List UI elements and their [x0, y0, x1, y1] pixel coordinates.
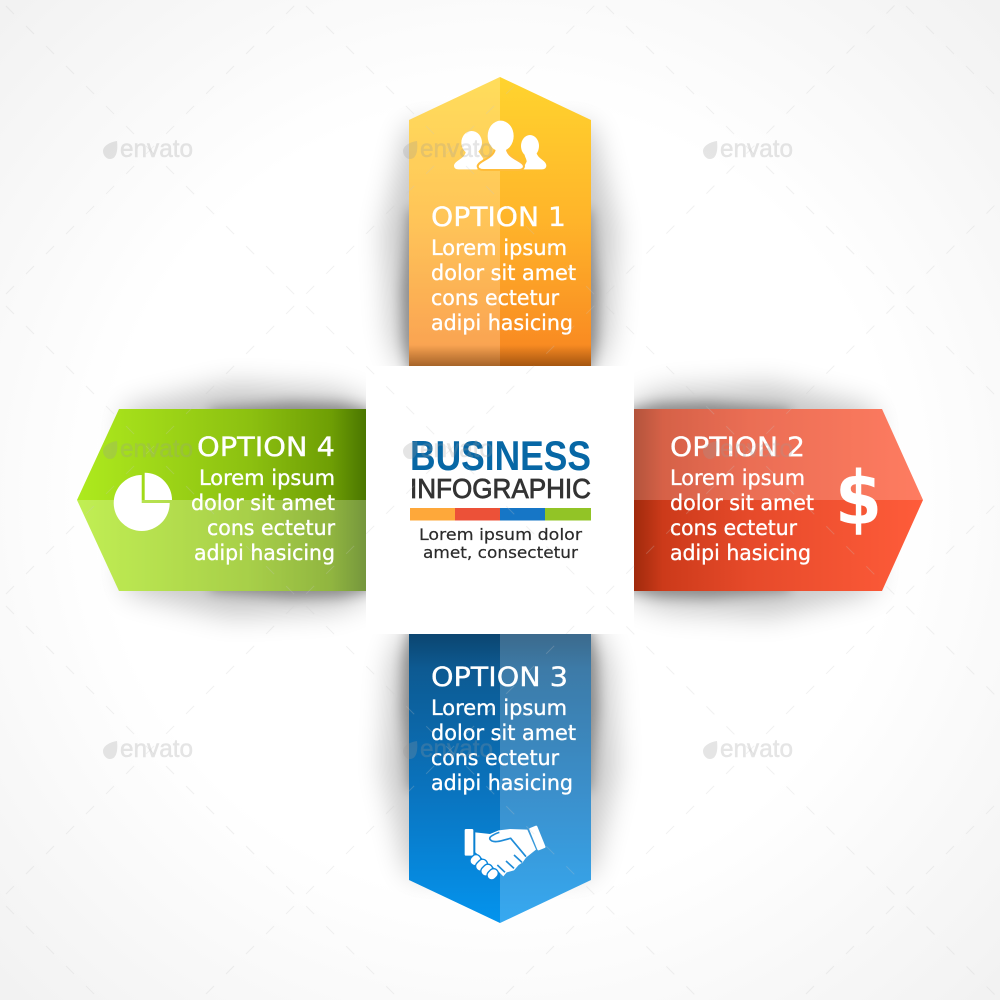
panel: option 3 — [409, 634, 591, 923]
icon: handshake — [465, 825, 546, 882]
text block: option 1: dolor sit amet — [431, 261, 576, 285]
center square background — [366, 366, 634, 634]
text block: option 4: adipi hasicing — [194, 541, 335, 565]
text block: option 4: dolor sit amet — [191, 491, 335, 515]
heading: option 3: OPTION 3 — [431, 662, 568, 693]
arrow shape: option 3 — [409, 634, 591, 923]
heading: option 1: OPTION 1 — [431, 202, 566, 233]
subtitle: amet, consectetur — [423, 543, 578, 562]
envato watermarks: envato — [720, 735, 793, 763]
heading: option 2: OPTION 2 — [670, 432, 805, 463]
envato watermarks: envato — [120, 135, 193, 163]
panel: center square — [366, 366, 634, 634]
icon: dollar sign: $ — [835, 456, 882, 542]
arrow shape: option 2 — [634, 409, 923, 591]
title: business: BUSINESS — [410, 432, 591, 479]
arrow shape: option 4 — [77, 409, 366, 591]
text block: option 4: cons ectetur — [207, 516, 335, 540]
panel: option 4 — [77, 409, 366, 591]
panel: option 2 — [634, 409, 923, 591]
text block: option 1: adipi hasicing — [431, 311, 573, 335]
envato watermarks: envato — [720, 435, 793, 463]
cast shadows behind the arrows — [125, 125, 875, 875]
subtitle — [419, 525, 582, 562]
icon: pie chart — [114, 473, 172, 531]
colour bar — [410, 508, 591, 520]
envato watermarks: envato — [420, 435, 493, 463]
envato watermarks: envato — [120, 735, 193, 763]
subtitle: Lorem ipsum dolor — [419, 525, 582, 544]
text block: option 2 — [670, 466, 814, 565]
text block: option 2: cons ectetur — [670, 516, 797, 540]
panel: option 1 — [409, 77, 591, 366]
envato watermarks: envato — [720, 135, 793, 163]
text block: option 1: Lorem ipsum — [431, 236, 567, 260]
text block: option 3: adipi hasicing — [431, 771, 573, 795]
text block: option 2: Lorem ipsum — [670, 466, 805, 490]
text block: option 4: Lorem ipsum — [199, 466, 335, 490]
arrow shape: option 1 — [409, 77, 591, 366]
text block: option 1: cons ectetur — [431, 286, 559, 310]
heading: option 4: OPTION 4 — [197, 432, 335, 463]
icon: people — [454, 121, 546, 170]
text block: option 3: dolor sit amet — [431, 721, 576, 745]
title: infographic: INFOGRAPHIC — [410, 473, 591, 504]
text block: option 2: dolor sit amet — [670, 491, 814, 515]
envato watermarks: envato — [420, 735, 493, 763]
envato watermarks: envato — [120, 435, 193, 463]
text block: option 1 — [431, 236, 576, 335]
text block: option 3: cons ectetur — [431, 746, 559, 770]
envato watermarks — [103, 135, 793, 763]
text block: option 3: Lorem ipsum — [431, 696, 567, 720]
text block: option 3 — [431, 696, 576, 795]
text block: option 4 — [191, 466, 335, 565]
envato watermarks: envato — [420, 135, 493, 163]
text block: option 2: adipi hasicing — [670, 541, 811, 565]
